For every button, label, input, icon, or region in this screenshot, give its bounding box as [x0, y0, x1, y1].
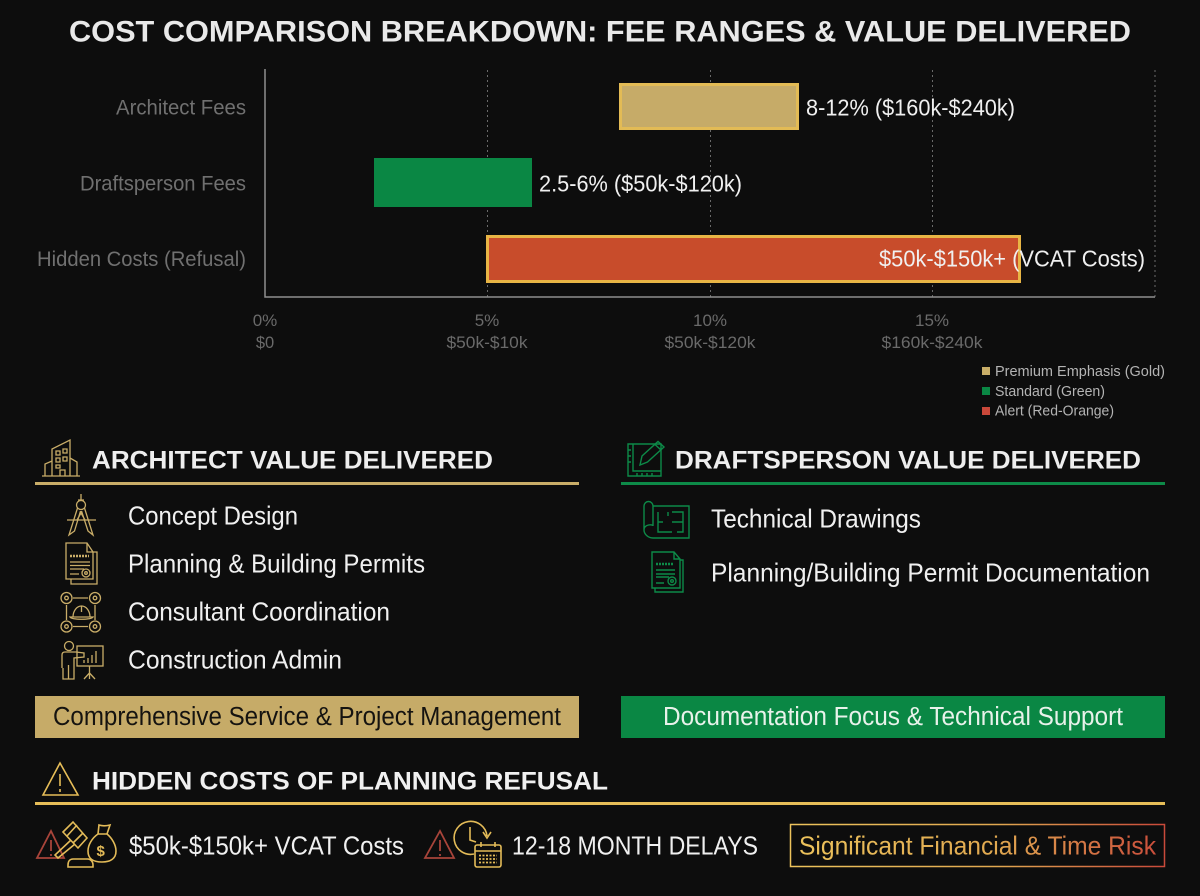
- category labels: Draftsperson Fees: [80, 172, 246, 196]
- bar: draftsperson fees: 2.5-6% ($50k-$120k): [539, 170, 742, 196]
- icon: warning triangle: [43, 763, 78, 795]
- icon: drafting pencil: [628, 442, 664, 476]
- bar: architect fees: [620, 84, 1015, 128]
- icon: warning, gavel and money bag: [37, 822, 116, 867]
- list item: planning and building permits: Planning & Building Permits: [128, 548, 425, 578]
- title: COST COMPARISON BREAKDOWN: FEE RANGES & VALUE DELIVERED: [69, 16, 1131, 48]
- heading: draftsperson: DRAFTSPERSON VALUE DELIVERED: [675, 446, 1141, 474]
- bar: hidden costs: [488, 236, 1145, 282]
- stat: VCAT costs: $50k-$150k+ VCAT Costs: [129, 830, 404, 860]
- legend: [982, 363, 1165, 420]
- bar: architect fees: 8-12% ($160k-$240k): [806, 94, 1015, 120]
- stat: month delays: 12-18 MONTH DELAYS: [512, 830, 758, 860]
- list item: consultant coordination: Consultant Coordination: [128, 596, 390, 626]
- panel: hidden costs of planning refusal: [35, 763, 1165, 867]
- panel: architect value delivered: [35, 440, 579, 738]
- axis tick labels: 0%: [253, 311, 277, 330]
- legend: Premium Emphasis (Gold): [995, 363, 1165, 380]
- axis tick labels: $0: [256, 334, 274, 352]
- list item: construction admin: Construction Admin: [128, 644, 342, 674]
- axis tick labels: 5%: [475, 311, 499, 330]
- heading: hidden costs: HIDDEN COSTS OF PLANNING REFUSAL: [92, 768, 608, 796]
- legend: Alert (Red-Orange): [995, 402, 1114, 420]
- axis tick labels: 10%: [693, 311, 727, 330]
- bar: draftsperson fees: [374, 158, 742, 207]
- panel: draftsperson value delivered: [621, 442, 1165, 738]
- axis tick labels: 15%: [915, 311, 949, 330]
- icon: permit documentation: [652, 552, 683, 592]
- category labels: Architect Fees: [116, 96, 246, 120]
- icon: permit document: [66, 543, 97, 584]
- axis tick labels: [253, 311, 983, 352]
- list item: permit documentation: Planning/Building Permit Documentation: [711, 558, 1150, 588]
- icon: warning, gavel and money bag: $: [96, 843, 106, 860]
- axis tick labels: $50k-$10k: [446, 333, 528, 352]
- icon: blueprint: [644, 502, 689, 538]
- axis tick labels: $50k-$120k: [664, 333, 756, 352]
- banner: comprehensive service: [35, 696, 579, 738]
- icon: warning, clock and calendar: [425, 821, 501, 867]
- banner: documentation focus: [621, 696, 1165, 738]
- list item: technical drawings: Technical Drawings: [711, 504, 921, 534]
- banner: documentation focus: Documentation Focus & Technical Support: [663, 703, 1123, 731]
- category labels: [37, 96, 246, 271]
- list item: concept design: Concept Design: [128, 500, 298, 530]
- bar: hidden costs: $50k-$150k+ (VCAT Costs): [879, 246, 1145, 272]
- bar chart: fee ranges: [37, 69, 1155, 352]
- icon: consultant coordination: [61, 592, 100, 632]
- callout: significant risk: [790, 824, 1164, 866]
- heading: architect: ARCHITECT VALUE DELIVERED: [92, 446, 493, 474]
- callout: significant risk: Significant Financial & Time Risk: [799, 830, 1157, 860]
- legend: Standard (Green): [995, 383, 1105, 400]
- icon: buildings: [42, 440, 80, 476]
- icon: compass: [67, 494, 96, 535]
- category labels: Hidden Costs (Refusal): [37, 247, 246, 271]
- axis tick labels: $160k-$240k: [882, 333, 983, 352]
- banner: comprehensive service: Comprehensive Service & Project Management: [53, 703, 561, 731]
- icon: presenter with chart: [62, 642, 103, 679]
